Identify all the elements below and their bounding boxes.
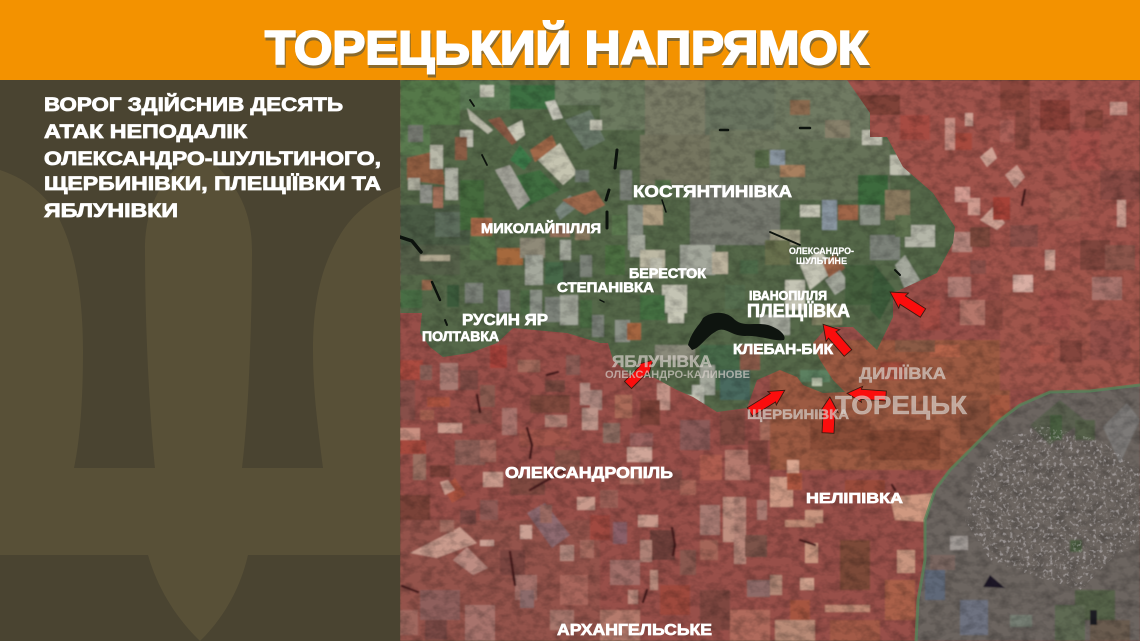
text block: summary of attacks: ВОРОГ ЗДІЙСНИВ ДЕСЯТЬ [44,94,343,116]
map labels: settlement names: ДИЛІЇВКА [859,364,946,383]
map labels: settlement names: ОЛЕКСАНДРО-КАЛИНОВЕ [605,369,750,381]
icon: trident watermark [0,150,400,641]
map zone: occupied red territory [400,80,1140,641]
text block: summary of attacks: ЯБЛУНІВКИ [44,201,178,222]
map labels: settlement names: ПОЛТАВКА [422,328,499,344]
map labels: settlement names [422,182,967,639]
arrow: attack from Toretsk [847,385,887,404]
map labels: settlement names: ОЛЕКСАНДРОПІЛЬ [505,465,673,482]
map labels: settlement names: АРХАНГЕЛЬСЬКЕ [557,622,712,639]
map labels: settlement names: БЕРЕСТОК [629,265,706,281]
map labels: settlement names: ІВАНОПІЛЛЯ [749,288,827,303]
text block: summary of attacks: АТАК НЕПОДАЛІК [44,122,247,143]
map labels: settlement names: ПЛЕЩІЇВКА [747,301,850,321]
arrow: attack near Shcherbynivka south [819,397,839,433]
header bar [0,0,1140,80]
map labels: settlement names: ОЛЕКСАНДРО- [789,246,854,256]
map labels: settlement names: ТОРЕЦЬК [835,390,967,420]
map labels: settlement names: МИКОЛАЙПІЛЛЯ [481,219,601,236]
map labels: settlement names: ЯБЛУНІВКА [612,352,712,371]
map labels: settlement names: ЩЕРБИНІВКА [747,406,849,422]
text block: summary of attacks [44,94,381,222]
arrow: attack near Yablunivka [622,355,658,391]
title: ТОРЕЦЬКИЙ НАПРЯМОК [265,21,868,74]
text block: summary of attacks: ЩЕРБИНІВКИ, ПЛЕЩІЇВКИ ТА [44,174,381,195]
map labels: settlement names: ШУЛЬТИНЕ [796,256,847,266]
map labels: settlement names: КЛЕБАН-БИК [733,341,834,358]
map labels: settlement names: СТЕПАНІВКА [557,279,654,295]
arrow: attack near Shcherbynivka west [746,383,789,419]
map zone: Ukrainian-held green territory [400,80,960,420]
arrow: attack near Pleshchiivka [816,318,855,359]
arrow: attack near Oleksandro-Shultyne [885,284,928,321]
panel: left text panel [0,80,400,641]
text block: summary of attacks: ОЛЕКСАНДРО-ШУЛЬТИНОГО, [44,149,381,170]
map labels: settlement names: КОСТЯНТИНІВКА [633,182,792,201]
map zone: grey territory near Pokrovsk side [900,380,1140,641]
map labels: settlement names: НЕЛІПІВКА [806,490,903,507]
map labels: settlement names: РУСИН ЯР [462,312,548,329]
